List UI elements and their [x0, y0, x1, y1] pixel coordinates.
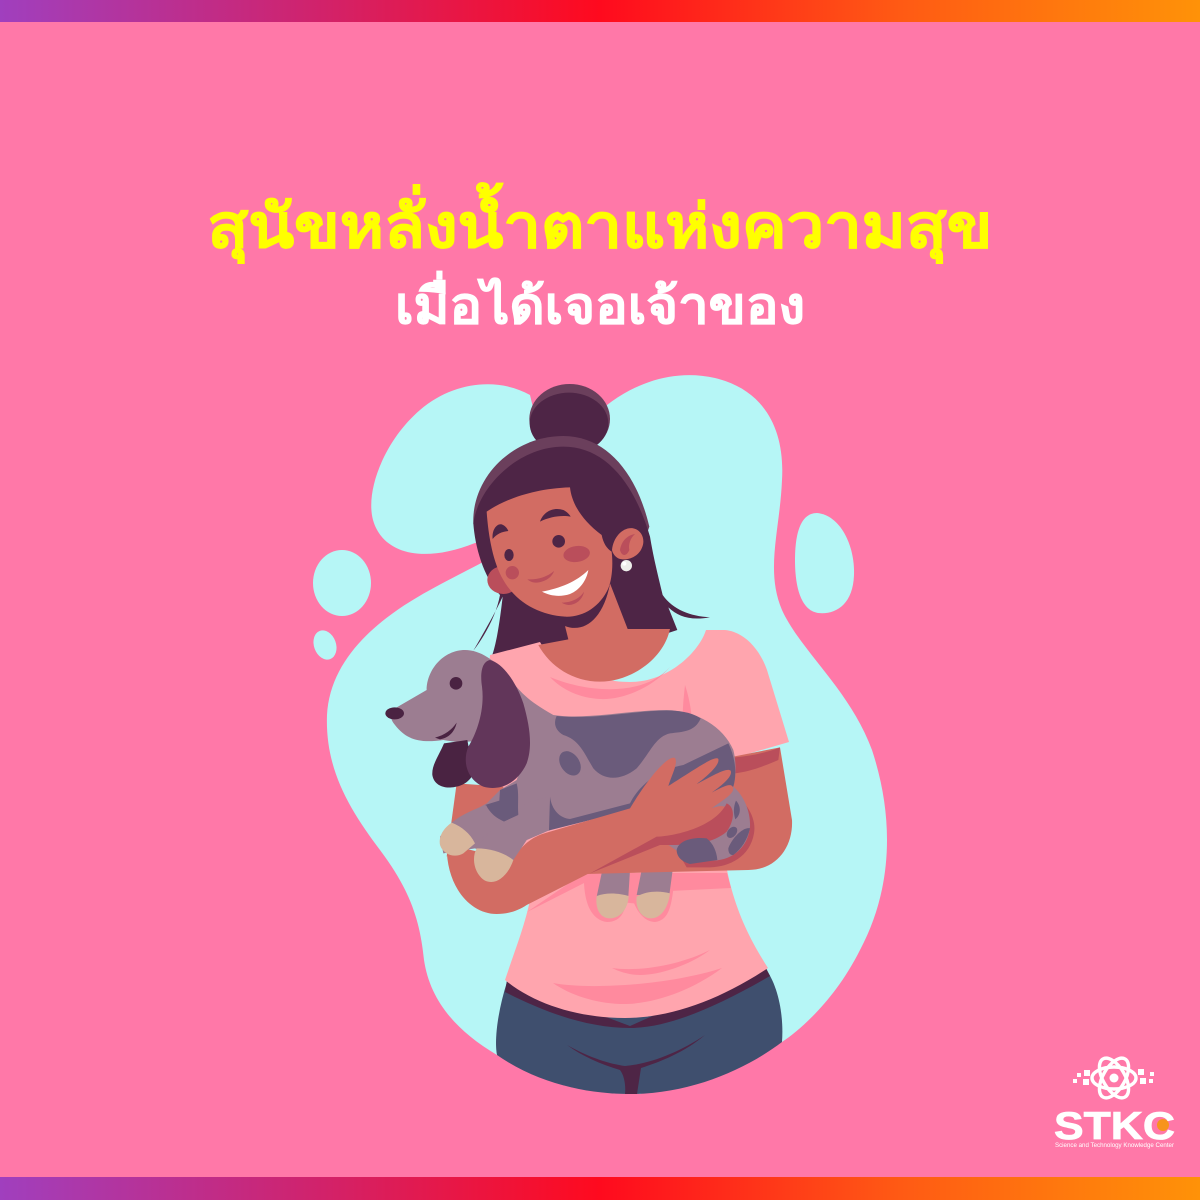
logo: STKC	[1054, 1053, 1175, 1149]
logo side dots	[1073, 1069, 1154, 1085]
forearm and hand	[447, 758, 733, 914]
dog body	[391, 650, 750, 861]
atom icon	[1092, 1053, 1136, 1103]
shirt	[480, 630, 789, 1018]
logo dot	[1157, 1119, 1169, 1131]
jeans	[496, 966, 782, 1094]
dog face	[450, 677, 462, 690]
dog hind shadow	[677, 793, 754, 867]
woman with dog illustration	[385, 384, 792, 1094]
logo tagline: Science and Technology Knowledge Center	[1055, 1143, 1174, 1149]
dog and arms	[385, 650, 792, 914]
background blobs	[310, 375, 887, 1094]
sleeve shadow	[735, 747, 780, 773]
head back: hair and bun	[473, 384, 710, 657]
dog ears	[432, 740, 473, 788]
right upper arm	[587, 747, 792, 874]
logo wordmark: STKC	[1054, 1105, 1175, 1148]
upper left arm	[447, 783, 503, 857]
subtitle: เมื่อได้เจอเจ้าของ	[395, 271, 805, 334]
title: สุนัขหลั่งน้ำตาแห่งความสุข	[208, 182, 992, 264]
top gradient bar	[0, 0, 1200, 22]
neck and face	[487, 487, 670, 682]
front legs and paws	[452, 797, 550, 860]
dog patches	[555, 711, 701, 778]
bottom gradient bar	[0, 1177, 1200, 1200]
back legs of dog	[596, 870, 673, 918]
